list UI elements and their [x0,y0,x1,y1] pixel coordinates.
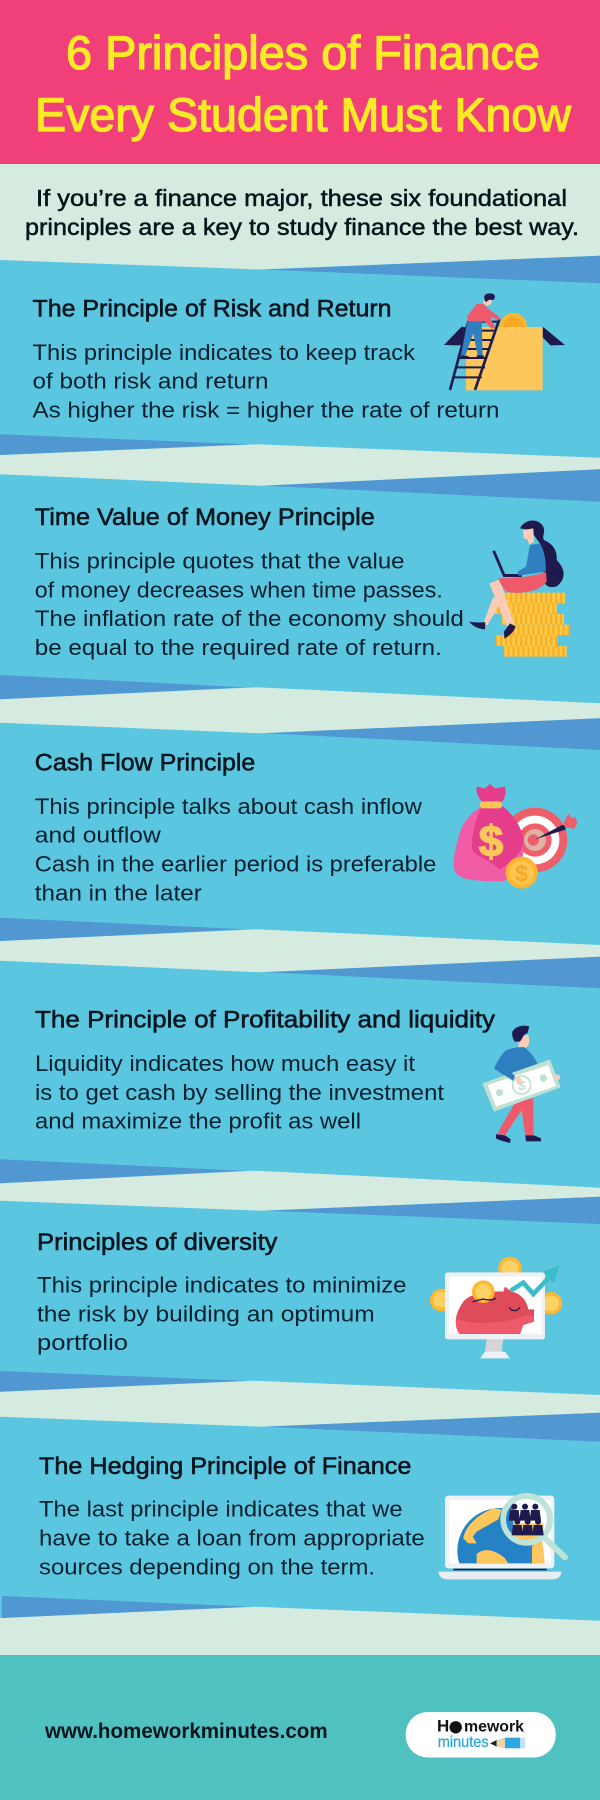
body text: of both risk and return [32,368,268,393]
body text: The inflation rate of the economy should [35,606,464,631]
body text [32,340,500,422]
body text: Cash in the earlier period is preferable [35,852,436,877]
body text: have to take a loan from appropriate [39,1526,425,1551]
icon: money bag, target and coin: $ [515,860,528,886]
icon: pencil [490,1738,525,1748]
header banner [0,0,600,164]
panel: risk and return [0,256,600,458]
intro text [25,185,579,240]
heading: The Principle of Risk and Return [32,296,392,323]
intro text: principles are a key to study finance the best way. [25,214,579,240]
icon: man carrying banknote [482,1026,561,1143]
body text [35,794,436,906]
icon: man carrying banknote: $ [518,1078,526,1093]
body text: than in the later [35,881,202,906]
heading: The Hedging Principle of Finance [39,1453,411,1480]
body text [35,548,464,660]
logo pill: mework [464,1719,524,1736]
panel: diversity [0,1197,600,1395]
icon: money bag, target and coin [454,784,577,889]
body text: of money decreases when time passes. [35,577,443,602]
heading: Time Value of Money Principle [35,504,375,531]
intro text: If you’re a finance major, these six foundational [36,185,567,211]
body text: The last principle indicates that we [39,1497,403,1522]
body text: This principle indicates to minimize [37,1273,406,1298]
body text [35,1051,445,1133]
body text: and maximize the profit as well [35,1108,361,1133]
body text [37,1273,406,1355]
body text: is to get cash by selling the investment [35,1080,445,1105]
icon: money bag, target and coin: $ [479,818,503,867]
body text: As higher the risk = higher the rate of return [32,397,500,422]
body text: sources depending on the term. [39,1554,375,1579]
body text: This principle talks about cash inflow [35,794,423,819]
body text: and outflow [35,823,162,848]
panel: time value of money [0,469,600,703]
logo pill: H [437,1717,449,1736]
body text: This principle quotes that the value [35,548,405,573]
icon: laptop, globe and magnifier [438,1496,565,1593]
body text: be equal to the required rate of return. [35,635,442,660]
title [35,26,572,141]
icon: woman with laptop on coin stack [469,520,569,657]
logo pill: minutes [438,1734,489,1751]
title: Every Student Must Know [35,88,572,141]
panel: profitability and liquidity [0,957,600,1188]
body text [39,1497,425,1579]
footer [0,1655,600,1800]
heading: Cash Flow Principle [35,750,255,777]
title: 6 Principles of Finance [66,26,540,79]
body text: the risk by building an optimum [37,1302,375,1327]
icon: piggy bank on monitor [430,1257,562,1358]
panel: cash flow [0,718,600,945]
body text: This principle indicates to keep track [32,340,416,365]
logo pill [406,1712,556,1758]
panel: hedging [0,1413,600,1621]
body text: Liquidity indicates how much easy it [35,1051,416,1076]
website url: www.homeworkminutes.com [44,1720,328,1743]
heading: The Principle of Profitability and liquidity [35,1007,495,1034]
body text: portfolio [37,1330,128,1355]
icon: man on ladder with box and coin [444,293,565,390]
heading: Principles of diversity [37,1229,278,1256]
